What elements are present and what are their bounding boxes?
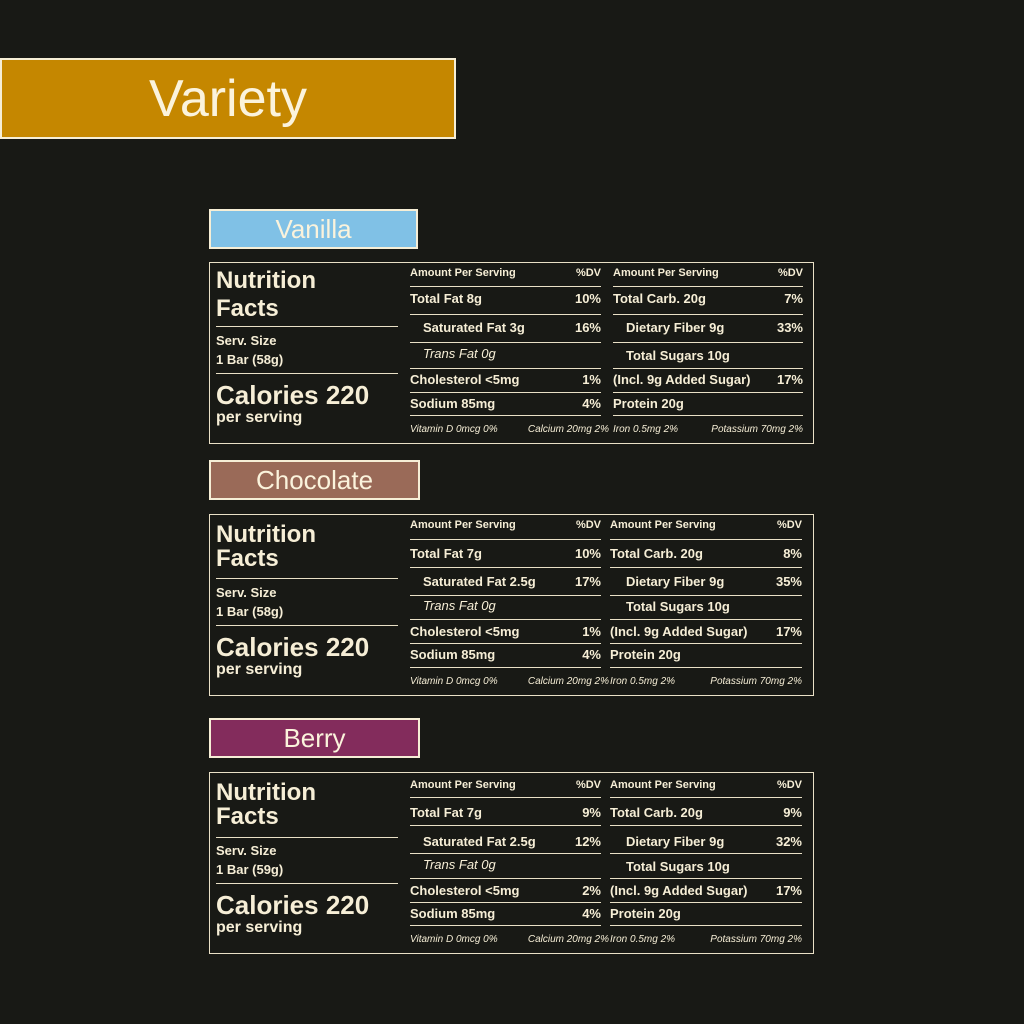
column 1: Vitamin D 0mcg 0% [410,934,498,945]
column 1: Amount Per Serving [410,519,516,531]
column 1: 4% [582,396,601,411]
heading [216,267,316,322]
column 2: Protein 20g [610,906,681,921]
column 2: Total Sugars 10g [626,348,730,363]
column 1: Cholesterol <5mg [410,624,519,639]
column 2: Total Carb. 20g [613,291,706,306]
column 1: 10% [575,546,601,561]
serving size [216,333,283,367]
column 2: %DV [778,267,803,279]
column 1: Total Fat 8g [410,291,482,306]
column 1: Saturated Fat 2.5g [423,834,536,849]
column 2: Potassium 70mg 2% [710,934,802,945]
column 1: Vitamin D 0mcg 0% [410,424,498,435]
column 2: (Incl. 9g Added Sugar) [610,624,747,639]
column 1 [410,519,609,687]
heading: Nutrition [216,779,316,806]
serving size: 1 Bar (58g) [216,352,283,367]
column 1: %DV [576,267,601,279]
calories: Calories 220 [216,890,369,920]
column 1: Calcium 20mg 2% [528,424,609,435]
column 2: (Incl. 9g Added Sugar) [610,883,747,898]
heading [216,779,316,830]
column 2: Protein 20g [610,647,681,662]
column 1: Sodium 85mg [410,396,495,411]
serving size: 1 Bar (58g) [216,604,283,619]
column 2: Potassium 70mg 2% [710,676,802,687]
serving size: Serv. Size [216,333,276,348]
column 2: %DV [777,779,802,791]
heading: Nutrition [216,267,316,294]
column 2: 17% [777,372,803,387]
serving size [216,585,283,619]
column 2: Total Sugars 10g [626,599,730,614]
column 1: Amount Per Serving [410,267,516,279]
column 2: Iron 0.5mg 2% [610,934,675,945]
column 1: 12% [575,834,601,849]
column 1: 4% [582,906,601,921]
calories: Calories 220 [216,632,369,662]
column 2: Dietary Fiber 9g [626,574,724,589]
column 1: 17% [575,574,601,589]
column 2: Amount Per Serving [610,779,716,791]
title [0,58,456,139]
column 2: Total Sugars 10g [626,859,730,874]
heading: Facts [216,295,279,322]
column 2: %DV [777,519,802,531]
label: Vanilla: Vanilla [275,214,352,244]
heading [216,521,316,572]
title: Variety [149,70,307,128]
column 1: 9% [582,805,601,820]
serving size [216,843,283,877]
column 1: Trans Fat 0g [423,346,496,361]
per serving: per serving [216,409,302,426]
heading: Nutrition [216,521,316,548]
column 1: Cholesterol <5mg [410,883,519,898]
column 2: Dietary Fiber 9g [626,834,724,849]
column 2: 17% [776,883,802,898]
column 1: 10% [575,291,601,306]
column 2: Protein 20g [613,396,684,411]
column 2: Dietary Fiber 9g [626,320,724,335]
column 1: 1% [582,372,601,387]
column 1: %DV [576,779,601,791]
column 2: Iron 0.5mg 2% [610,676,675,687]
column 2: 9% [783,805,802,820]
column 1: Amount Per Serving [410,779,516,791]
heading: Facts [216,803,279,830]
panel: berry nutrition facts [209,772,814,954]
serving size: Serv. Size [216,585,276,600]
calories: Calories 220 [216,380,369,410]
column 1: Total Fat 7g [410,546,482,561]
column 1: 2% [582,883,601,898]
column 1: Trans Fat 0g [423,598,496,613]
serving size: 1 Bar (59g) [216,862,283,877]
column 2: 17% [776,624,802,639]
label: Chocolate: Chocolate [256,465,373,495]
column 2: Total Carb. 20g [610,805,703,820]
serving size: Serv. Size [216,843,276,858]
column 2 [610,519,802,687]
label: Chocolate [209,460,420,500]
column 2: Amount Per Serving [610,519,716,531]
column 1: 16% [575,320,601,335]
label: Berry [209,718,420,758]
per serving: per serving [216,661,302,678]
label: Berry: Berry [283,723,346,753]
column 1: 4% [582,647,601,662]
column 2: 8% [783,546,802,561]
column 1: Calcium 20mg 2% [528,934,609,945]
column 2: Potassium 70mg 2% [711,424,803,435]
column 1 [410,779,609,945]
column 2 [610,779,802,945]
column 1: Sodium 85mg [410,906,495,921]
panel: chocolate nutrition facts [209,514,814,696]
column 2: 32% [776,834,802,849]
label: Vanilla [209,209,418,249]
column 2: Iron 0.5mg 2% [613,424,678,435]
column 1: 1% [582,624,601,639]
column 2: 7% [784,291,803,306]
column 2: (Incl. 9g Added Sugar) [613,372,750,387]
column 1: Trans Fat 0g [423,857,496,872]
panel: vanilla nutrition facts [209,262,814,444]
column 1: Saturated Fat 2.5g [423,574,536,589]
column 2: 35% [776,574,802,589]
column 1: Vitamin D 0mcg 0% [410,676,498,687]
column 1: Total Fat 7g [410,805,482,820]
column 1 [410,267,609,435]
column 1: %DV [576,519,601,531]
column 2 [613,267,803,435]
heading: Facts [216,545,279,572]
per serving: per serving [216,919,302,936]
column 2: 33% [777,320,803,335]
column 2: Total Carb. 20g [610,546,703,561]
column 1: Calcium 20mg 2% [528,676,609,687]
column 1: Saturated Fat 3g [423,320,525,335]
column 1: Cholesterol <5mg [410,372,519,387]
column 2: Amount Per Serving [613,267,719,279]
column 1: Sodium 85mg [410,647,495,662]
